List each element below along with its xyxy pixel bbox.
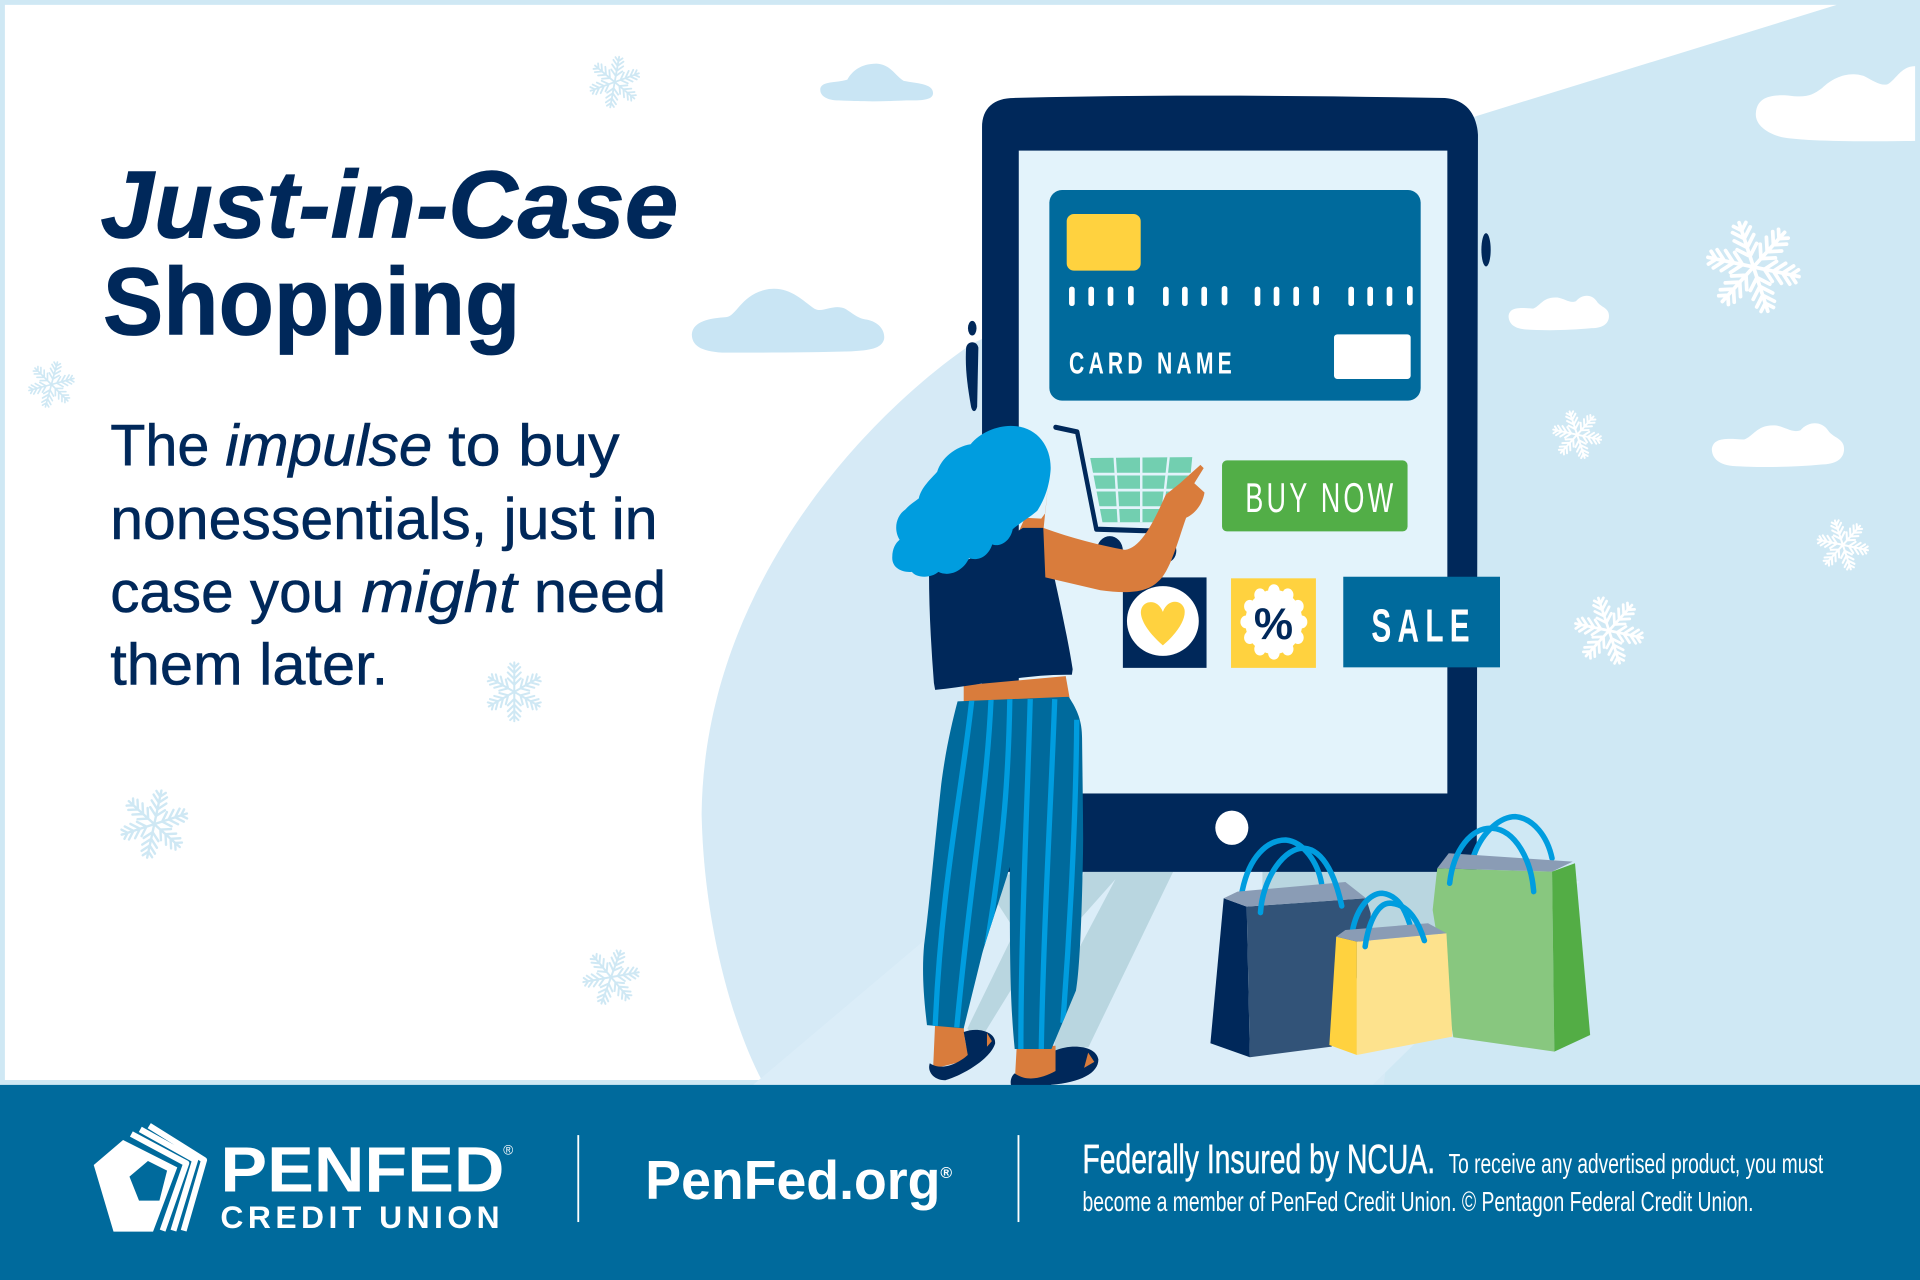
footer bar [0, 1085, 1920, 1280]
shopping bags [1210, 817, 1590, 1057]
body text: need [534, 560, 666, 625]
buy now button: BUY NOW [1245, 475, 1396, 521]
logo subtitle: CREDIT UNION [220, 1199, 500, 1235]
woman hair [892, 426, 1051, 577]
woman feet [929, 1023, 1098, 1093]
disclosure text: Federally Insured by NCUA. [1082, 1136, 1435, 1182]
green bag [1433, 817, 1590, 1052]
credit card [1049, 190, 1421, 401]
percent tile: % [1254, 600, 1293, 649]
woman neck [1019, 483, 1048, 531]
penfed logo [94, 1126, 513, 1235]
logo registered mark: ® [503, 1143, 513, 1158]
woman arm [1043, 465, 1204, 592]
body text: The [110, 413, 209, 478]
navy bag [1210, 840, 1371, 1057]
woman midriff [964, 676, 1070, 704]
logo mark [94, 1126, 204, 1232]
card signature block [1334, 334, 1411, 379]
woman trousers [921, 692, 1088, 1055]
body text: nonessentials, just in [110, 487, 658, 552]
body text: might [361, 560, 520, 625]
snowflakes right [1547, 209, 1875, 674]
body text: them later. [110, 632, 388, 697]
percent tile [1231, 578, 1316, 668]
clouds white [1509, 66, 1915, 467]
sale tile [1343, 577, 1500, 667]
heading: Just-in-Case [100, 153, 678, 259]
shopping cart [1056, 427, 1192, 565]
clouds blue [692, 64, 933, 353]
body text [110, 413, 666, 697]
buy now button [1222, 460, 1408, 531]
card name label: CARD NAME [1069, 346, 1236, 380]
sale tile: SALE [1371, 601, 1476, 652]
floor light area [753, 863, 1580, 1085]
heart tile [1123, 577, 1207, 668]
tablet shadows [967, 872, 1438, 1053]
tablet [982, 96, 1478, 872]
heading: Shopping [103, 249, 520, 355]
card chip [1067, 214, 1141, 271]
logo wordmark: PENFED [220, 1134, 504, 1205]
tablet home button [1215, 811, 1248, 845]
website: PenFed.org [645, 1149, 940, 1211]
body text: case you [110, 560, 344, 625]
yellow bag [1329, 893, 1452, 1055]
shopping woman [892, 426, 1204, 1093]
footer dividers [577, 1135, 1019, 1222]
woman top [929, 528, 1073, 690]
background hill [702, 110, 1477, 1085]
website: ® [940, 1165, 952, 1182]
tablet side buttons [966, 233, 1491, 411]
body text: to buy [448, 413, 620, 478]
body text: impulse [225, 413, 432, 478]
card number dashes [1069, 286, 1413, 306]
tablet screen [1019, 151, 1447, 793]
shadow light slit [1068, 879, 1116, 970]
heading [100, 153, 678, 355]
disclosure text [1082, 1136, 1823, 1217]
snowflakes left [23, 52, 646, 1013]
